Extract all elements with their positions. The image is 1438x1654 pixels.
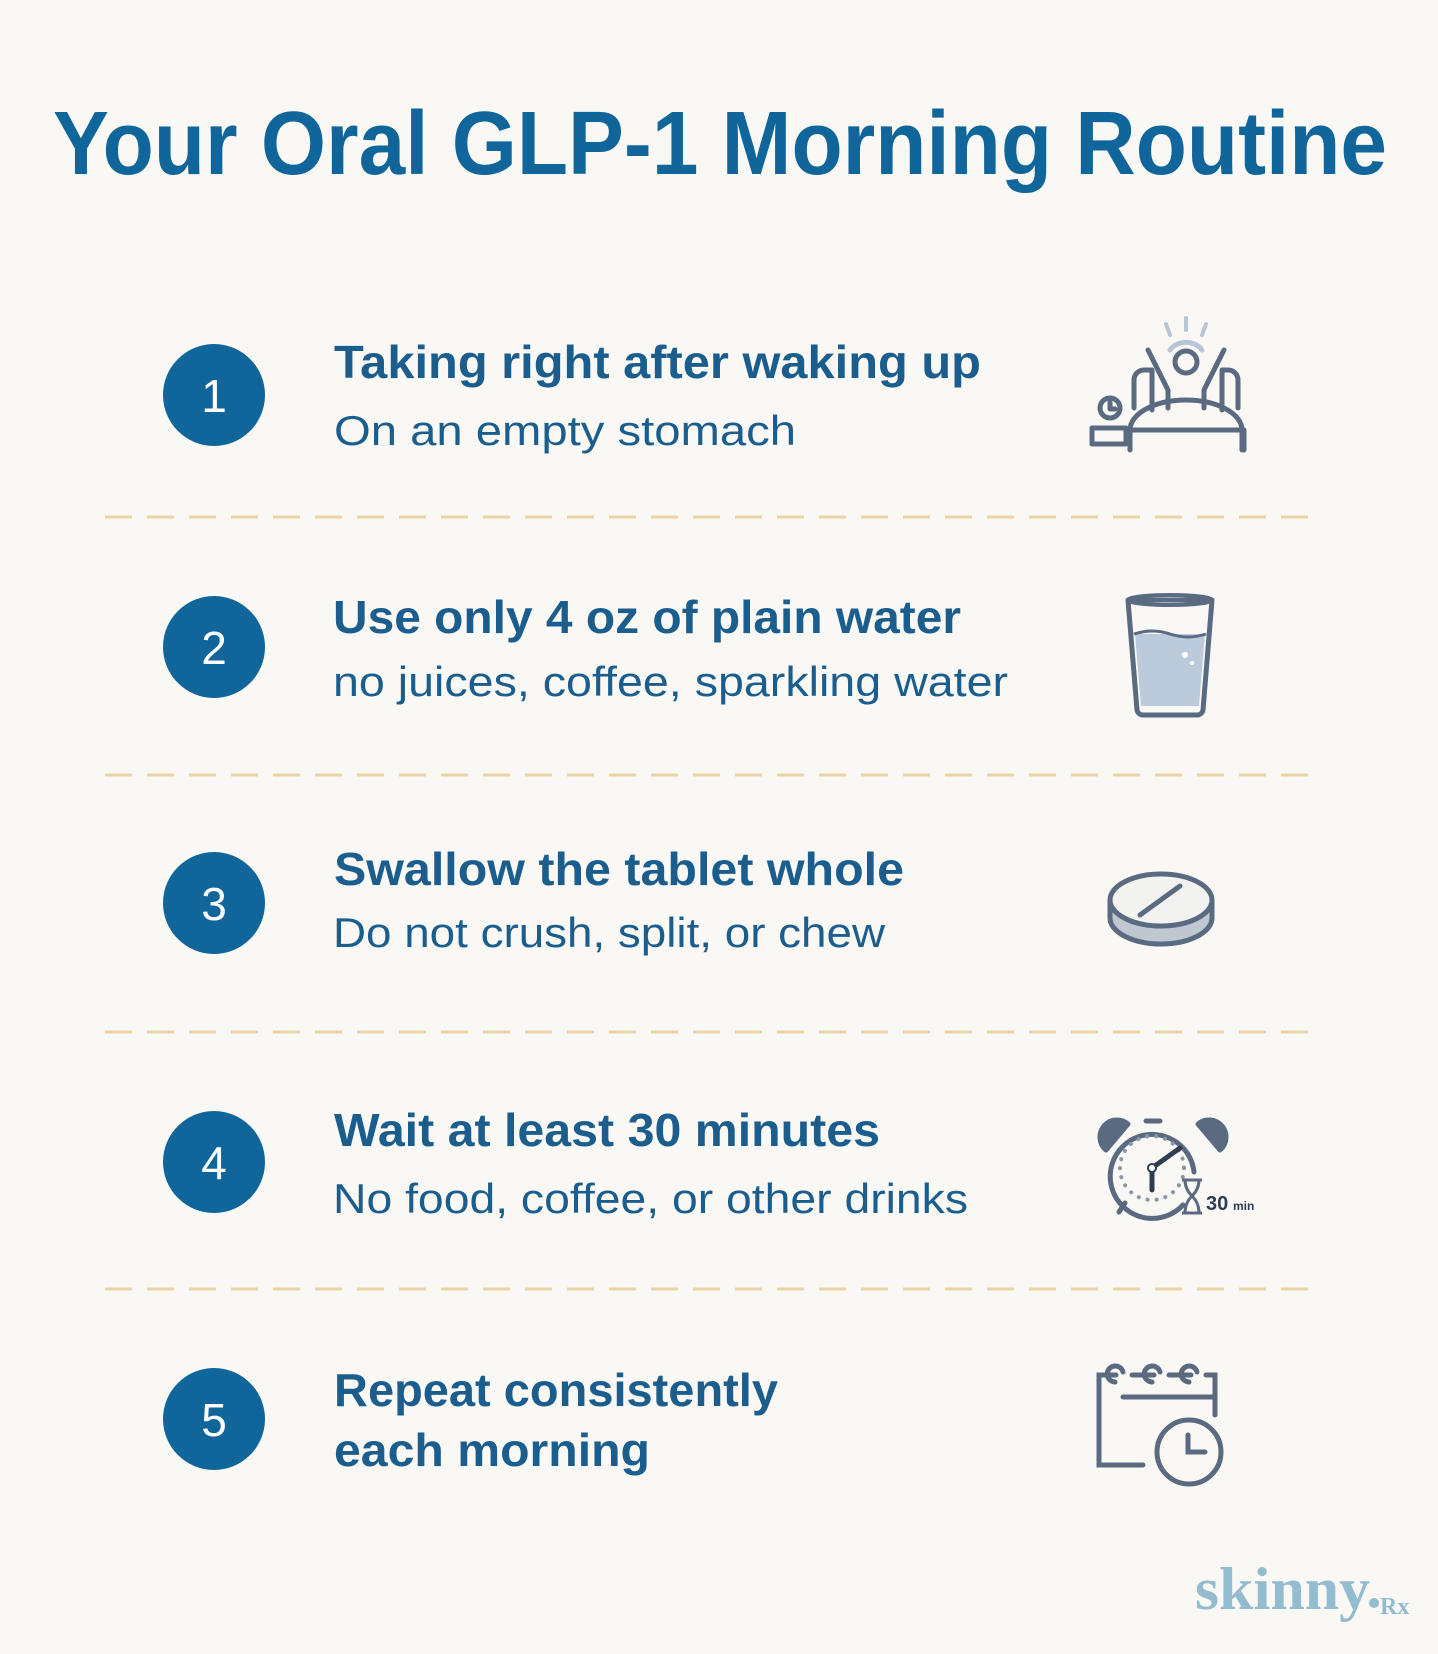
heading 2: Use only 4 oz of plain water xyxy=(333,591,961,643)
step 3 xyxy=(163,843,1212,956)
number badge 2: 2 xyxy=(201,622,227,674)
icon: tablet xyxy=(1110,874,1212,944)
subtext 1: On an empty stomach xyxy=(334,407,796,454)
icon: alarm clock 30 min: min xyxy=(1233,1199,1254,1213)
icon: waking up in bed xyxy=(1092,318,1244,450)
heading 1: Taking right after waking up xyxy=(334,336,981,388)
subtext 2: no juices, coffee, sparkling water xyxy=(333,658,1008,705)
step 1 xyxy=(163,318,1244,454)
subtext 3: Do not crush, split, or chew xyxy=(333,909,886,956)
number badge 5 xyxy=(163,1368,265,1470)
number badge 4 xyxy=(163,1111,265,1213)
number badge 2 xyxy=(163,596,265,698)
logo: Rx xyxy=(1380,1594,1409,1620)
heading 5: each morning xyxy=(334,1424,650,1476)
step 5 xyxy=(163,1364,1221,1484)
icon: glass of water xyxy=(1128,595,1212,715)
heading 3: Swallow the tablet whole xyxy=(334,843,904,895)
number badge 3 xyxy=(163,852,265,954)
heading 5: Repeat consistently xyxy=(334,1364,778,1416)
icon: alarm clock 30 min xyxy=(1100,1120,1254,1218)
icon: calendar with clock xyxy=(1099,1366,1221,1484)
number badge 1 xyxy=(163,344,265,446)
subtext 4: No food, coffee, or other drinks xyxy=(333,1175,968,1222)
icon: alarm clock 30 min: 30 xyxy=(1206,1193,1228,1215)
number badge 5: 5 xyxy=(201,1394,227,1446)
number badge 3: 3 xyxy=(201,878,227,930)
number badge 1: 1 xyxy=(201,370,227,422)
logo: skinny xyxy=(1195,1556,1370,1622)
heading 5 xyxy=(334,1364,778,1476)
step 2 xyxy=(163,591,1212,715)
step 4 xyxy=(163,1104,1254,1222)
heading 4: Wait at least 30 minutes xyxy=(334,1104,880,1156)
number badge 4: 4 xyxy=(201,1137,227,1189)
